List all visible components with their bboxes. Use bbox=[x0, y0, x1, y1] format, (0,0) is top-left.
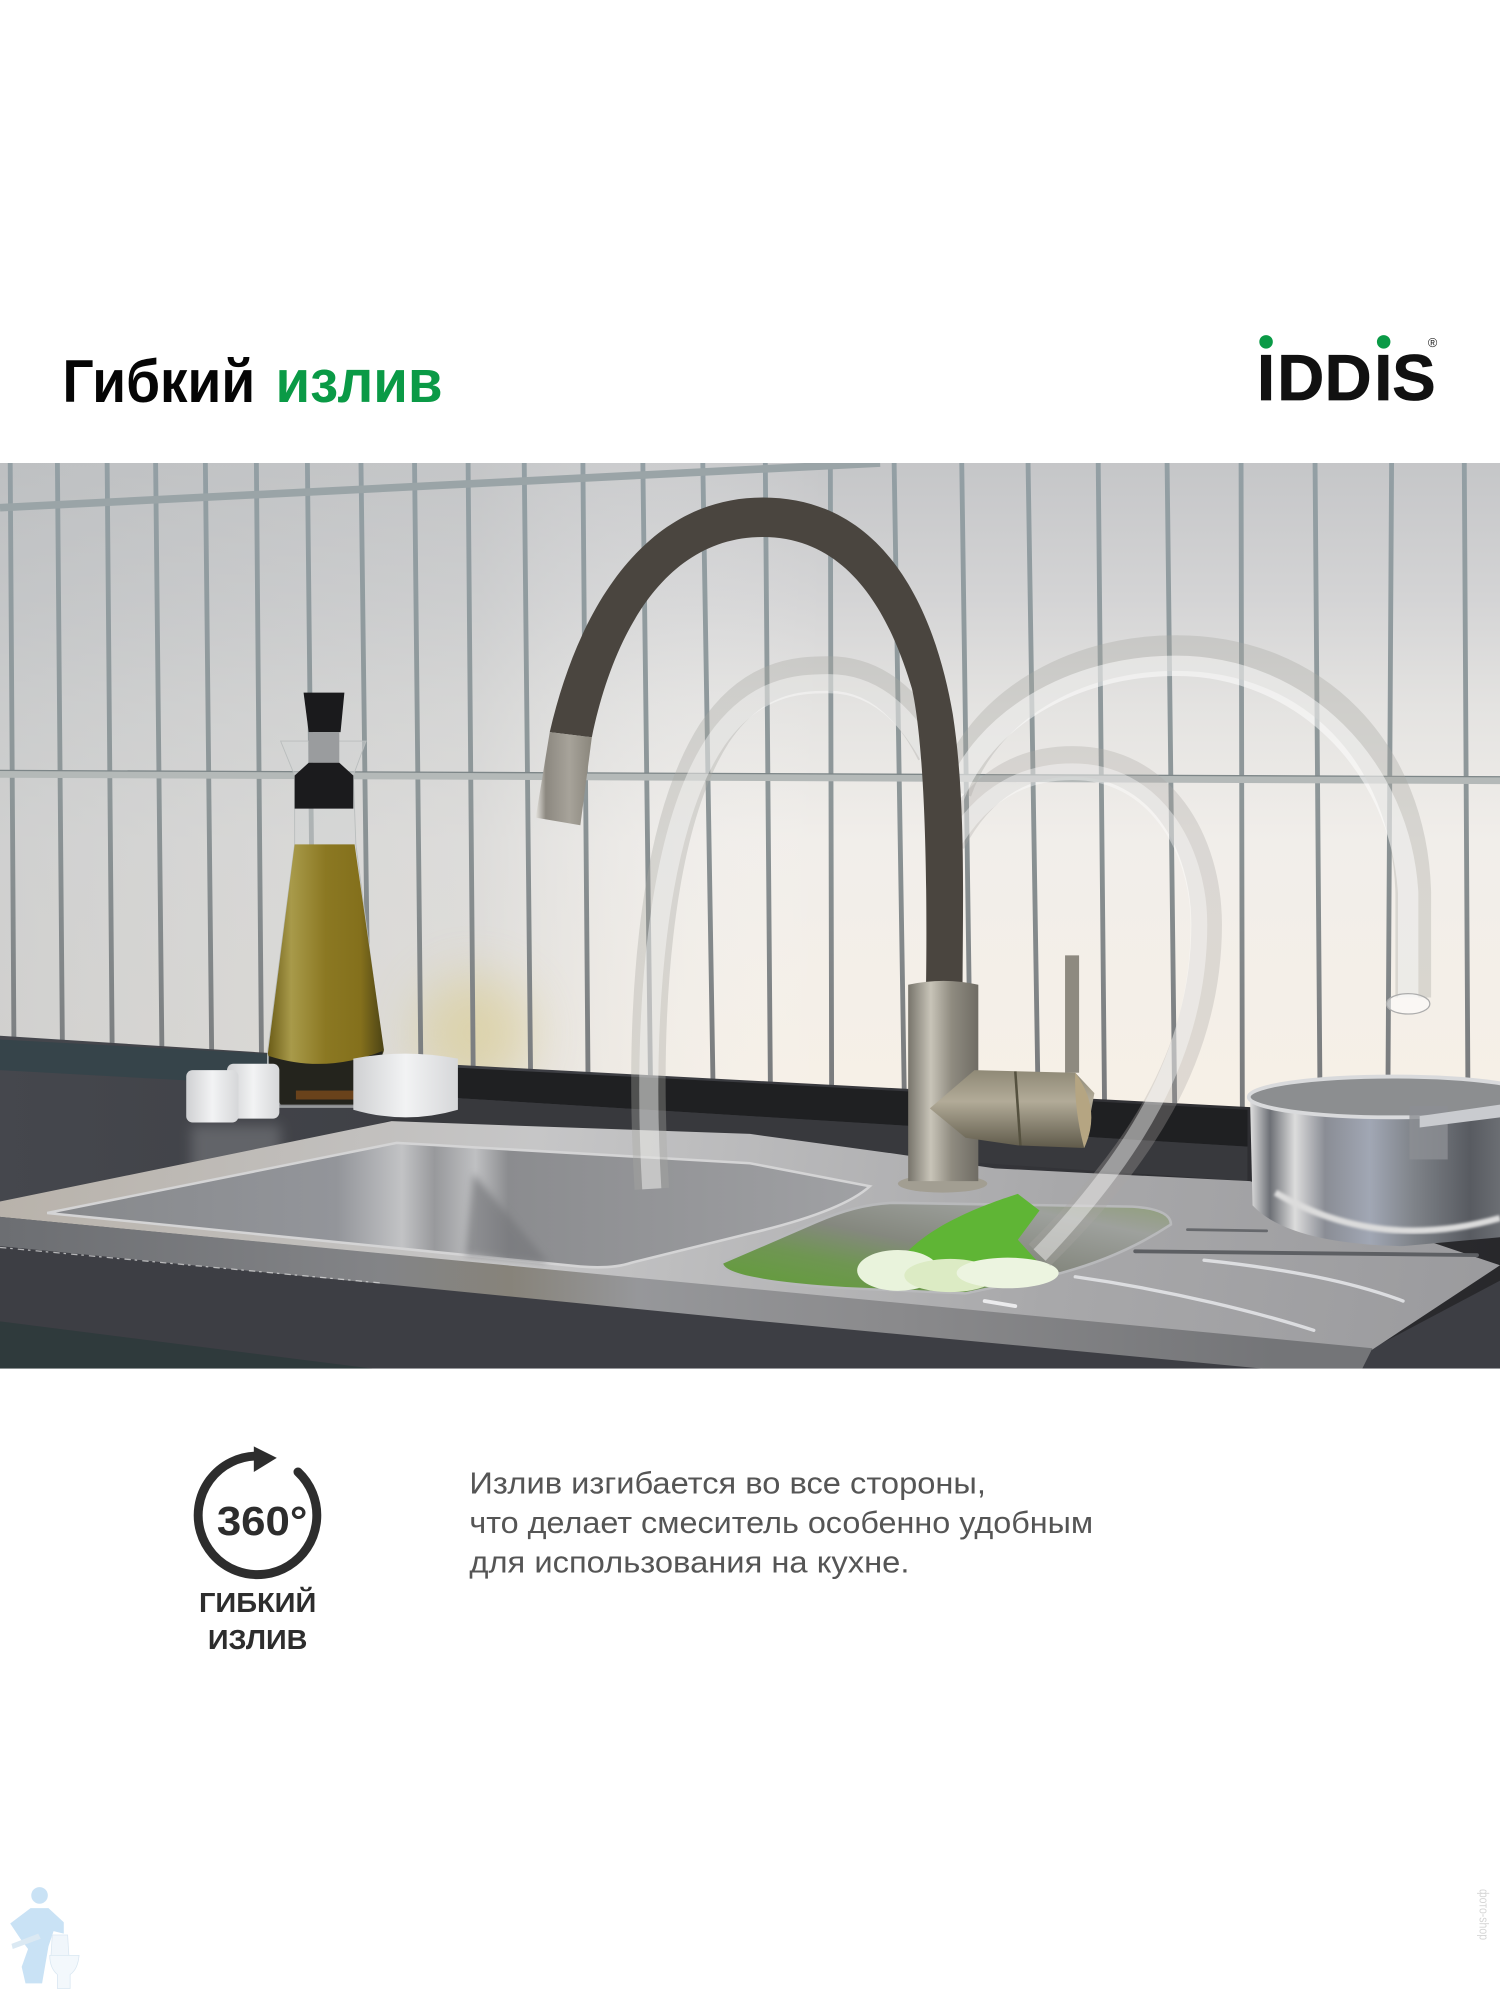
faucet body bbox=[898, 981, 987, 1193]
icon: 360 degree arrow: 360° bbox=[217, 1498, 307, 1544]
title: Гибкий bbox=[62, 348, 255, 415]
drainboard grooves bbox=[985, 1230, 1477, 1330]
counter front edge and cabinet bbox=[0, 1246, 1500, 1369]
icon: 360 degree arrow bbox=[198, 1446, 317, 1575]
logo: IDDIS: IDDIS bbox=[1257, 341, 1436, 414]
small basin bbox=[722, 1203, 1171, 1293]
faucet spout bbox=[550, 497, 963, 989]
counter top bbox=[0, 1036, 1500, 1367]
sink deck bbox=[0, 1121, 1500, 1349]
icon label bbox=[199, 1587, 316, 1655]
wall tiles bbox=[0, 463, 1500, 1139]
pan bbox=[1249, 1077, 1500, 1246]
title bbox=[62, 348, 443, 415]
description text: Излив изгибается во все стороны, bbox=[469, 1467, 986, 1501]
ghost spout: lower bbox=[950, 761, 1207, 1255]
icon label: ГИБКИЙ bbox=[199, 1587, 316, 1618]
description text: что делает смеситель особенно удобным bbox=[469, 1506, 1093, 1540]
watermark: vertical site name: фото-shop bbox=[1477, 1889, 1492, 1940]
logo: IDDIS: ® bbox=[1428, 335, 1438, 350]
ghost spout: right bbox=[954, 653, 1413, 997]
faucet handle bbox=[930, 1070, 1094, 1148]
ghost nozzle end bbox=[1386, 994, 1430, 1014]
lettuce bbox=[857, 1194, 1059, 1292]
icon label: ИЗЛИВ bbox=[208, 1624, 307, 1655]
title: излив bbox=[276, 348, 443, 415]
description text bbox=[469, 1467, 1093, 1580]
specular line along counter edge bbox=[0, 1247, 383, 1283]
ghost spout: left bbox=[648, 673, 934, 1189]
watermark: plumber with toilet bbox=[10, 1887, 79, 1989]
main basin bbox=[47, 1143, 870, 1267]
description text: для использования на кухне. bbox=[469, 1546, 909, 1580]
white cups bbox=[186, 1054, 458, 1122]
photo: kitchen sink with flexible faucet bbox=[0, 463, 1500, 1369]
faucet nozzle bbox=[536, 732, 592, 825]
front rim of sink bbox=[0, 1217, 1372, 1369]
oil bottle bbox=[267, 693, 384, 1107]
faucet lever bbox=[1065, 955, 1079, 1073]
